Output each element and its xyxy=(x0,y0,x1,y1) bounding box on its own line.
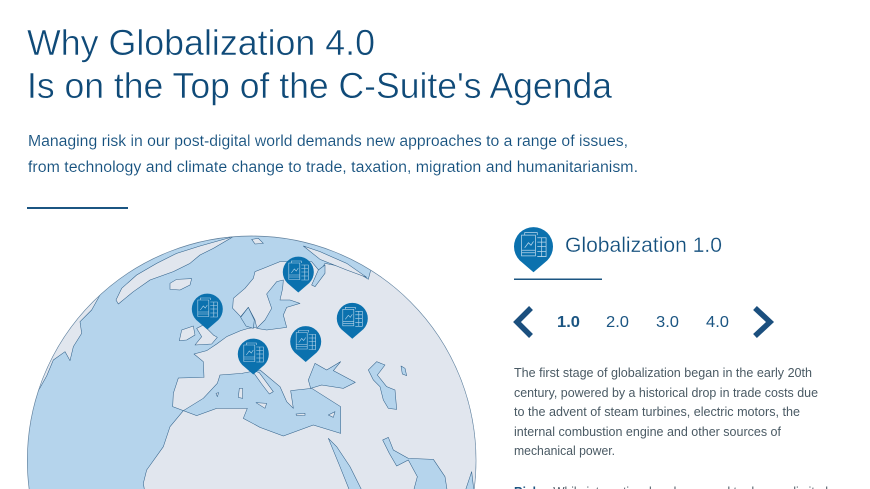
subtitle xyxy=(28,133,638,176)
land: Italy and islands xyxy=(216,370,335,417)
sea: Persian Gulf and Arabian Sea xyxy=(383,437,447,489)
sea: Baltic xyxy=(257,280,300,330)
heading: Globalization 1.0: Globalization 1.0 xyxy=(565,234,722,257)
land: Greenland xyxy=(116,237,233,304)
arrow: next xyxy=(755,308,770,336)
subtitle: from technology and climate change to trade, taxation, migration and humanitarianism. xyxy=(28,159,638,176)
body text: to the advent of steam turbines, electric motors, the xyxy=(514,405,800,419)
title xyxy=(27,22,613,106)
sea: Aral xyxy=(401,366,407,376)
body text: century, powered by a historical drop in trade costs due xyxy=(514,386,818,400)
version navigation: 3.0 xyxy=(656,314,679,331)
globe map xyxy=(20,236,500,489)
title: Is on the Top of the C-Suite's Agenda xyxy=(27,65,613,106)
land: Britain xyxy=(195,325,217,345)
land: Eurasia and Africa xyxy=(20,237,500,489)
body text xyxy=(514,366,818,458)
arrow: previous xyxy=(517,308,531,336)
map pins xyxy=(192,257,368,374)
land: Iceland xyxy=(170,279,192,290)
body text: The first stage of globalization began in the early 20th xyxy=(514,366,812,380)
version navigation xyxy=(557,314,729,331)
sea: Mediterranean xyxy=(183,370,341,436)
sea: White Sea xyxy=(312,265,325,287)
title: Why Globalization 4.0 xyxy=(27,22,375,63)
seas xyxy=(183,265,474,489)
land: Canada xyxy=(38,295,100,391)
land: Novaya Zemlya xyxy=(303,246,367,277)
sea: Caspian xyxy=(368,362,397,409)
sea: Bay of Bengal edge xyxy=(465,472,474,489)
version navigation: 4.0 xyxy=(706,314,729,331)
icon: Globalization pin xyxy=(514,227,553,272)
land: Svalbard xyxy=(252,238,263,244)
sea: Red Sea xyxy=(328,438,362,489)
subtitle: Managing risk in our post-digital world demands new approaches to a range of issues, xyxy=(28,133,628,150)
version navigation: 1.0 xyxy=(557,314,580,331)
title divider xyxy=(27,207,128,209)
body text: internal combustion engine and other sources of xyxy=(514,425,782,439)
sea: Black Sea xyxy=(308,362,355,388)
heading divider xyxy=(514,278,602,280)
sea: Kattegat xyxy=(241,307,254,328)
land: Ireland xyxy=(179,326,195,341)
version navigation: 2.0 xyxy=(606,314,629,331)
body text: mechanical power. xyxy=(514,444,615,458)
